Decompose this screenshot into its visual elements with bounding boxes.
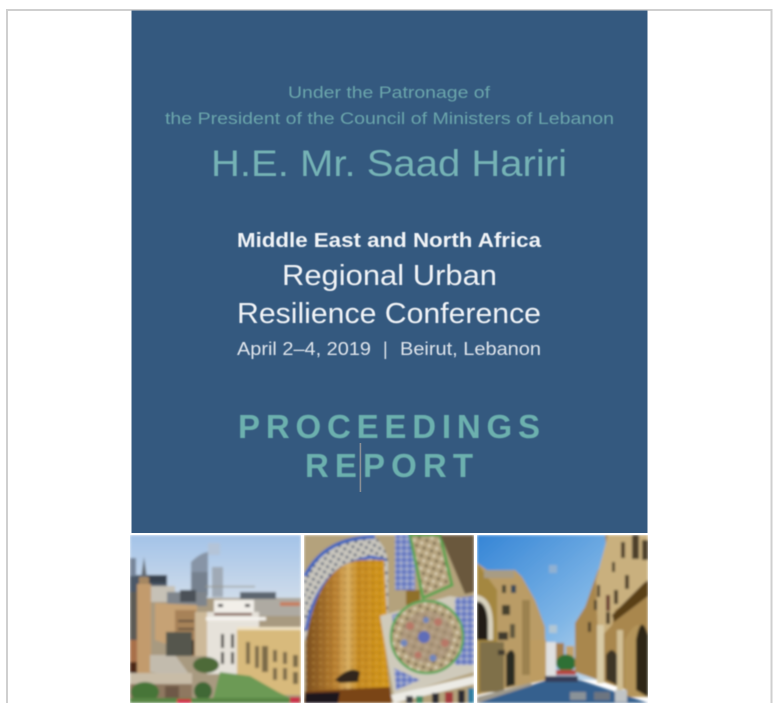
conference title: Middle East and North Africa [237, 230, 542, 252]
report title [238, 408, 540, 484]
date and location: April 2–4, 2019 [237, 339, 371, 359]
photo: mosaic arch [304, 535, 474, 703]
photo: Beirut street [477, 535, 648, 703]
patron name: H.E. Mr. Saad Hariri [211, 143, 567, 184]
report title: PROCEEDINGS [238, 408, 540, 445]
patronage text: Under the Patronage of [288, 84, 490, 102]
date and location: | [383, 339, 388, 359]
patronage text: the President of the Council of Ministers of Lebanon [165, 110, 614, 128]
text cursor line [360, 443, 361, 492]
conference title [237, 230, 542, 330]
conference title: Resilience Conference [237, 298, 541, 330]
date and location [237, 339, 541, 359]
patronage text [165, 84, 614, 128]
photo: Beirut skyline [130, 535, 301, 703]
panel: blue cover [132, 10, 648, 533]
conference title: Regional Urban [282, 260, 497, 292]
date and location: Beirut, Lebanon [400, 339, 541, 359]
report title: REPORT [305, 447, 473, 484]
